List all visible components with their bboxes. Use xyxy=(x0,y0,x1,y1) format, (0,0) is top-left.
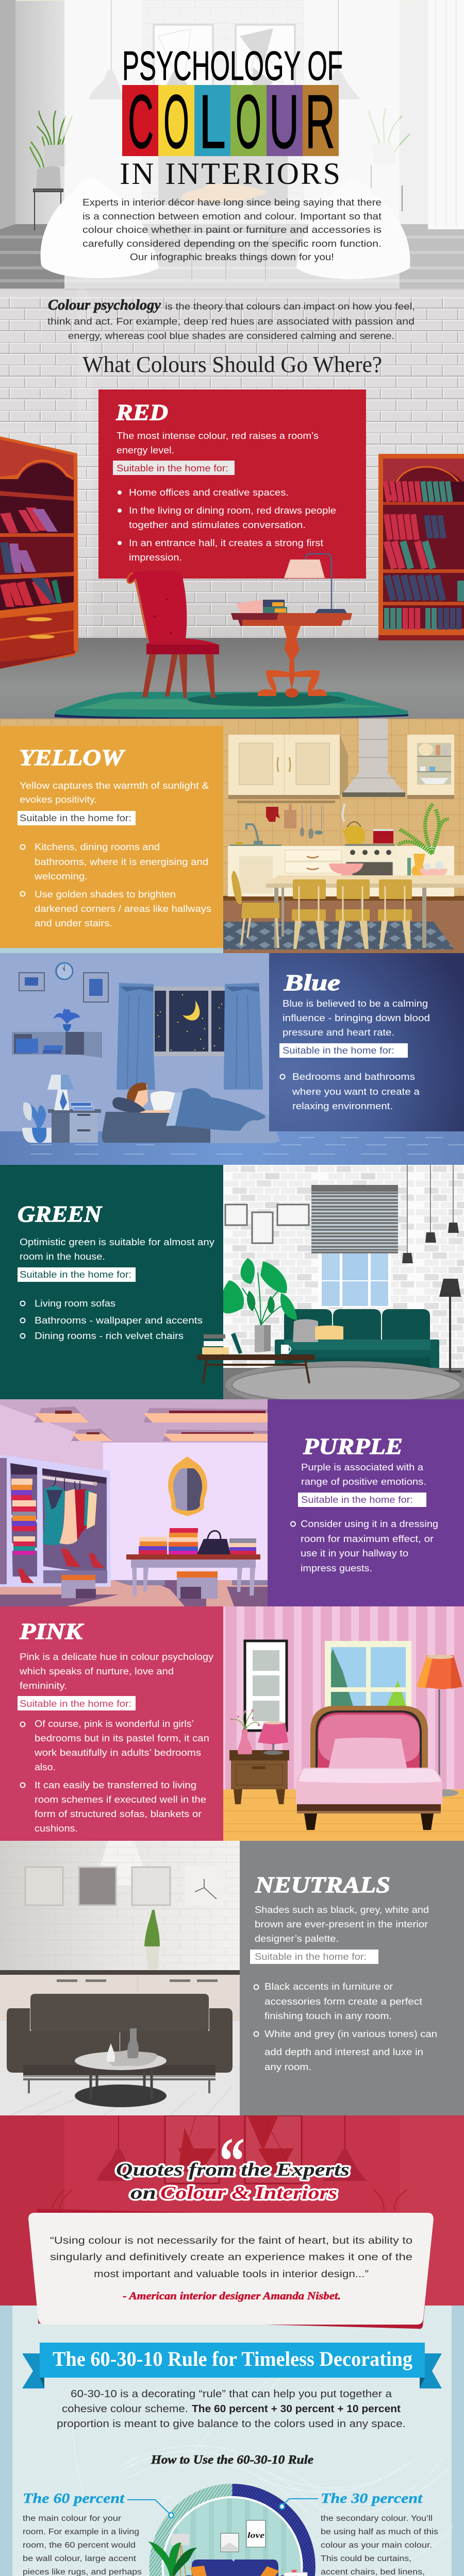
panel: green xyxy=(0,1165,223,1399)
blue description: influence - bringing down blood xyxy=(283,1013,430,1023)
green description: room in the house. xyxy=(20,1251,105,1262)
heading: blue: Blue xyxy=(284,970,340,995)
yellow bullet list: Kitchens, dining rooms and xyxy=(35,842,160,852)
colour psychology paragraph: is the theory that colours can impact on how you feel, xyxy=(165,301,415,312)
green description: Optimistic green is suitable for almost any xyxy=(20,1237,214,1247)
yellow bullet list: and under stairs. xyxy=(35,918,112,928)
blue bullet list: where you want to create a xyxy=(292,1087,420,1097)
illustration: kitchen xyxy=(223,719,464,953)
kitchen wall xyxy=(0,719,464,901)
yellow bullet list: darkened corners / areas like hallways xyxy=(35,904,211,914)
pink bullet list: cushions. xyxy=(35,1823,78,1834)
quote attribution: - American interior designer Amanda Nisbet. xyxy=(123,2290,341,2302)
text: the 60 percent: room. For example in a living xyxy=(23,2528,139,2536)
floor of red room xyxy=(0,638,464,719)
suitable label: Suitable in the home for: xyxy=(283,1045,394,1056)
pink bullet list: room schemes if executed well in the xyxy=(35,1794,206,1805)
suitable label xyxy=(18,1267,136,1282)
panel: neutrals xyxy=(240,1841,464,2115)
blue description: Blue is believed to be a calming xyxy=(283,998,428,1009)
suitable label: Suitable in the home for: xyxy=(255,1952,367,1962)
red description: energy level. xyxy=(117,445,174,455)
60-30-10 intro paragraph: proportion is meant to give balance to the colors used in any space. xyxy=(57,2418,406,2430)
chart: 60-30-10 colour ring with room xyxy=(148,2484,316,2576)
pink bullet list: also. xyxy=(35,1762,56,1772)
title: colour block with letters: C xyxy=(128,79,154,164)
neutrals bullet list: any room. xyxy=(264,2062,311,2072)
intro paragraph: is a connection between emotion and colour. Important so that xyxy=(82,211,382,222)
heading: red: RED xyxy=(115,400,168,425)
suitable label: Suitable in the home for: xyxy=(20,813,131,823)
heading: quotes from the experts xyxy=(116,2159,350,2203)
suitable label xyxy=(18,1696,136,1710)
plant and lamp xyxy=(148,2534,197,2576)
purple description: range of positive emotions. xyxy=(301,1477,426,1487)
colour psychology paragraph: energy, whereas cool blue shades are considered calming and serene. xyxy=(68,331,394,341)
neutrals description xyxy=(255,1905,429,1944)
blue bullet list xyxy=(280,1072,420,1111)
banner title: The 60-30-10 Rule for Timeless Decorating xyxy=(53,2347,412,2370)
green bullet list: Living room sofas xyxy=(35,1298,115,1309)
red bullet list: In the living or dining room, red draws people xyxy=(129,505,336,516)
blue sofa xyxy=(182,2560,286,2576)
text: the 30 percent xyxy=(321,2490,438,2576)
red bullet list: Home offices and creative spaces. xyxy=(129,487,289,498)
yellow description: Yellow captures the warmth of sunlight & xyxy=(20,781,209,791)
panel: yellow xyxy=(0,726,223,948)
pink description: Pink is a delicate hue in colour psychology xyxy=(20,1652,213,1662)
suitable label xyxy=(18,811,136,825)
text: the 60 percent xyxy=(23,2490,142,2576)
purple bullet list xyxy=(291,1519,438,1573)
hero plants left xyxy=(30,111,72,230)
yellow bullet list: welcoming. xyxy=(34,871,88,882)
suitable label xyxy=(298,1493,426,1507)
neutrals bullet list xyxy=(254,1981,437,2072)
pink description: femininity. xyxy=(20,1681,67,1691)
purple bullet list: use it in your hallway to xyxy=(301,1548,408,1558)
panel: blue xyxy=(269,953,464,1131)
green bullet list xyxy=(21,1298,203,1341)
intro paragraph: Our infographic breaks things down for you! xyxy=(130,252,334,262)
red bullet list xyxy=(118,487,336,563)
hero plants right xyxy=(369,108,410,211)
colour psychology paragraph: Colour psychology xyxy=(48,297,161,313)
panel: purple xyxy=(268,1399,464,1607)
illustration: right bookcase xyxy=(378,454,464,640)
icon: quotation mark: “ xyxy=(219,2124,245,2198)
pink bullet list: form of structured sofas, blankets or xyxy=(35,1809,202,1819)
quote text: singularly and definitively create an experience makes it one of the xyxy=(50,2252,412,2263)
heading: what colours should go where: What Colours Should Go Where? xyxy=(82,352,382,377)
card shadow xyxy=(37,2209,434,2329)
hero background: room photo xyxy=(0,0,464,290)
colour psychology paragraph xyxy=(47,297,415,341)
pink bullet list: It can easily be transferred to living xyxy=(35,1780,196,1790)
illustration: pink bedroom xyxy=(223,1606,464,1841)
suitable label xyxy=(250,1950,378,1964)
intro paragraph xyxy=(82,197,382,262)
suitable label: Suitable in the home for: xyxy=(301,1495,413,1505)
text: the 60 percent: The 60 percent xyxy=(23,2490,125,2506)
heading: quotes from the experts: Quotes from the Experts xyxy=(116,2159,350,2180)
quote card xyxy=(28,2209,434,2329)
connector: 60 percent xyxy=(127,2500,173,2518)
text: the 60 percent: room, the 60 percent would xyxy=(23,2541,136,2550)
title: colour block with letters: O xyxy=(236,79,261,164)
heading: quotes from the experts: Colour & Interiors xyxy=(160,2182,337,2203)
section: 60-30-10 background xyxy=(0,2306,464,2576)
pink description: which speaks of nurture, love and xyxy=(19,1666,174,1676)
suitable label: Suitable in the home for: xyxy=(20,1699,131,1709)
quotes section background xyxy=(0,2115,464,2306)
title: colour block with letters: U xyxy=(269,79,299,164)
illustration: green living room xyxy=(223,1165,464,1399)
60-30-10 intro paragraph: 60-30-10 is a decorating “rule” that can help you put together a xyxy=(71,2388,392,2400)
neutrals bullet list: Black accents in furniture or xyxy=(264,1981,393,1992)
blue description xyxy=(283,998,430,1038)
blue description: pressure and heart rate. xyxy=(283,1027,394,1038)
neutrals bullet list: finishing touch in any room. xyxy=(264,2011,392,2021)
intro paragraph: colour choice whether in paint or furniture and accessories is xyxy=(82,225,382,235)
red description xyxy=(117,431,319,455)
hero center wash overlays xyxy=(64,0,464,290)
heading: quotes from the experts: on xyxy=(130,2182,156,2203)
heading: how to use: How to Use the 60-30-10 Rule xyxy=(151,2453,313,2467)
purple description xyxy=(301,1462,426,1487)
neutrals description: designer’s palette. xyxy=(255,1934,339,1944)
illustration: left bookcase xyxy=(0,436,78,669)
hero beanbags and coffee table xyxy=(0,179,464,290)
pink description xyxy=(19,1652,213,1691)
yellow bullet list: bathrooms, where it is energising and xyxy=(35,857,208,867)
connector: 30 percent xyxy=(279,2499,318,2509)
heading: green: GREEN xyxy=(18,1201,103,1227)
brick wall background xyxy=(0,289,464,638)
red bullet list: In an entrance hall, it creates a strong first xyxy=(129,538,323,548)
title: colour block with letters: R xyxy=(305,79,335,164)
yellow description xyxy=(20,781,209,805)
text: the 60 percent: the main colour for your xyxy=(23,2514,121,2523)
illustration: rug xyxy=(55,692,408,719)
text: the 30 percent: This could be curtains, xyxy=(321,2554,411,2563)
title: colour block with letters xyxy=(122,79,339,164)
frame text: love xyxy=(247,2531,264,2540)
purple bullet list: Consider using it in a dressing xyxy=(301,1519,438,1529)
neutrals bullet list: accessories form create a perfect xyxy=(264,1996,422,2007)
green bullet list: Bathrooms - wallpaper and accents xyxy=(35,1315,203,1326)
red bullet list: impression. xyxy=(129,552,182,563)
neutrals description: brown are ever-present in the interior xyxy=(255,1919,428,1929)
text: the 30 percent: colour as your main colour. xyxy=(321,2541,432,2550)
text: the 30 percent: the secondary colour. You’ll xyxy=(321,2514,433,2523)
illustration: neutral living room xyxy=(0,1841,240,2115)
suitable label: Suitable in the home for: xyxy=(117,463,228,473)
pink bullet list: bedrooms but in its pastel form, it can xyxy=(35,1733,209,1743)
suitable label xyxy=(113,461,235,475)
red bullet list: together and stimulates conversation. xyxy=(129,520,306,530)
text: the 30 percent: The 30 percent xyxy=(321,2490,423,2506)
yellow description: evokes positivity. xyxy=(20,794,97,805)
blue bullet list: relaxing environment. xyxy=(292,1101,393,1111)
illustration: table with lamp and books xyxy=(231,554,352,698)
intro paragraph: Experts in interior décor have long since being saying that there xyxy=(82,197,382,208)
green description xyxy=(20,1237,214,1262)
intro paragraph: carefully considered depending on the specific room function. xyxy=(82,239,382,249)
illustration: purple dressing room xyxy=(0,1399,268,1607)
quote text xyxy=(50,2235,412,2280)
60-30-10 intro paragraph xyxy=(57,2388,406,2430)
heading: purple: PURPLE xyxy=(303,1434,403,1459)
yellow bullet list: Use golden shades to brighten xyxy=(35,889,176,900)
quote text: most important and valuable tools in interior design...” xyxy=(94,2269,369,2280)
text: the 30 percent: be using half as much of this xyxy=(321,2528,438,2536)
purple description: Purple is associated with a xyxy=(301,1462,424,1472)
blue bullet list: Bedrooms and bathrooms xyxy=(292,1072,415,1082)
purple bullet list: room for maximum effect, or xyxy=(301,1534,434,1544)
suitable label xyxy=(279,1043,408,1058)
heading: yellow: YELLOW xyxy=(19,745,125,770)
green bullet list: Dining rooms - rich velvet chairs xyxy=(35,1331,184,1341)
nightstand xyxy=(284,2570,307,2576)
illustration: red chair xyxy=(127,570,219,698)
quote text: “Using colour is not necessarily for the faint of heart, but its ability to xyxy=(50,2235,412,2246)
heading: neutrals: NEUTRALS xyxy=(255,1872,390,1897)
neutrals description: Shades such as black, grey, white and xyxy=(255,1905,429,1915)
neutrals bullet list: add depth and interest and luxe in xyxy=(264,2047,423,2057)
yellow bullet list xyxy=(21,842,211,928)
pink bullet list: Of course, pink is wonderful in girls’ xyxy=(35,1719,194,1729)
ribbon banner xyxy=(22,2343,442,2388)
pink bullet list xyxy=(21,1719,209,1834)
pink bullet list: work beautifully in adults’ bedrooms xyxy=(34,1748,201,1758)
panel: pink xyxy=(0,1606,223,1841)
suitable label: Suitable in the home for: xyxy=(20,1269,131,1280)
text: the 60 percent: be wall colour, large accent xyxy=(23,2554,137,2563)
60-30-10 intro paragraph: The 60 percent + 30 percent + 10 percent xyxy=(192,2403,401,2415)
purple bullet list: impress guests. xyxy=(301,1563,372,1573)
illustration: blue bedroom xyxy=(0,953,464,1165)
title: colour block with letters: O xyxy=(163,79,189,164)
title: colour block with letters: L xyxy=(199,79,226,164)
colour psychology paragraph: think and act. For example, deep red hues are associated with passion and xyxy=(47,316,415,327)
heading: pink: PINK xyxy=(19,1619,84,1644)
coffee table overlap xyxy=(197,1334,223,1383)
60-30-10 intro paragraph: cohesive colour scheme. xyxy=(62,2403,188,2415)
red description: The most intense colour, red raises a room’s xyxy=(117,431,319,441)
room scene xyxy=(164,2498,301,2576)
neutrals bullet list: White and grey (in various tones) can xyxy=(264,2029,437,2039)
panel: red xyxy=(98,389,366,579)
title: in interiors: IN INTERIORS xyxy=(120,157,340,191)
